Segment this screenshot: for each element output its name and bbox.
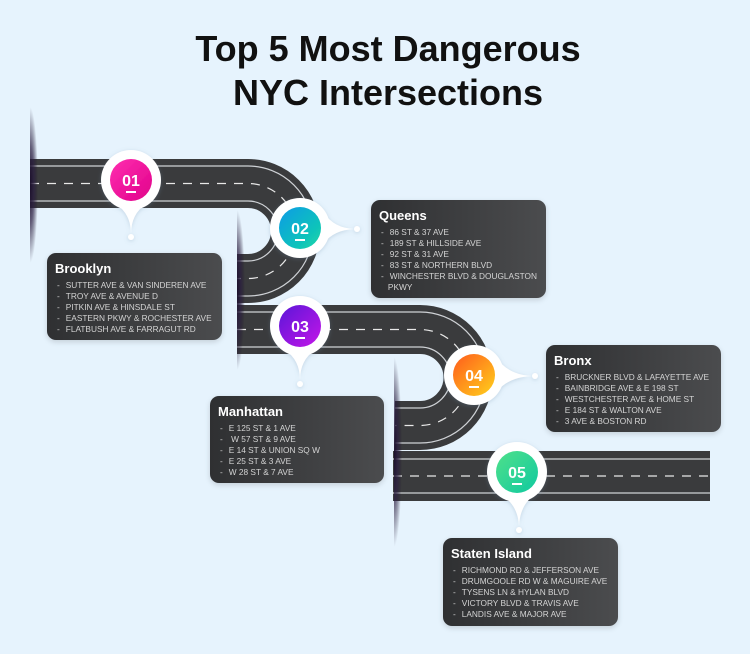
card: Queens: PKWY: [388, 282, 412, 292]
road: segment 5: [393, 451, 710, 501]
card: Brooklyn: SUTTER AVE & VAN SINDEREN AVE: [66, 280, 206, 290]
road: segments 3-4: [237, 312, 486, 443]
card: Manhattan: E 25 ST & 3 AVE: [229, 456, 291, 466]
card: Bronx: WESTCHESTER AVE & HOME ST: [565, 394, 694, 404]
pin 02: 02: [291, 221, 309, 238]
card: Brooklyn: Brooklyn: [55, 261, 111, 276]
card: Bronx: E 184 ST & WALTON AVE: [565, 405, 662, 415]
title: NYC Intersections: [233, 72, 543, 113]
card: Queens: WINCHESTER BLVD & DOUGLASTON: [390, 271, 537, 281]
card: Bronx: BAINBRIDGE AVE & E 198 ST: [565, 383, 679, 393]
road: segments 1-2: [30, 166, 313, 296]
pin 04: [444, 345, 538, 405]
pin 01: [101, 150, 161, 240]
pin 03: [270, 296, 330, 387]
card: Bronx: BRUCKNER BLVD & LAFAYETTE AVE: [565, 372, 709, 382]
card: Manhattan: E 125 ST & 1 AVE: [229, 423, 296, 433]
card: Bronx: 3 AVE & BOSTON RD: [565, 416, 647, 426]
card: Bronx: Bronx: [554, 353, 592, 368]
card: Manhattan: W 57 ST & 9 AVE: [231, 434, 296, 444]
card: Queens: 86 ST & 37 AVE: [390, 227, 449, 237]
card: Staten Island: TYSENS LN & HYLAN BLVD: [462, 587, 569, 597]
pin 03: 03: [291, 319, 309, 336]
card: Manhattan: [210, 396, 384, 483]
card: Queens: Queens: [379, 208, 427, 223]
card: Brooklyn: [47, 253, 222, 340]
card: Staten Island: VICTORY BLVD & TRAVIS AVE: [462, 598, 579, 608]
pin 04: 04: [465, 368, 483, 385]
road graphic: [30, 109, 710, 544]
card: Brooklyn: EASTERN PKWY & ROCHESTER AVE: [66, 313, 212, 323]
card: Staten Island: DRUMGOOLE RD W & MAGUIRE AVE: [462, 576, 607, 586]
title: Top 5 Most Dangerous: [195, 28, 581, 69]
card: Manhattan: W 28 ST & 7 AVE: [229, 467, 293, 477]
card: Brooklyn: TROY AVE & AVENUE D: [66, 291, 158, 301]
card: Staten Island: Staten Island: [451, 546, 532, 561]
card: Brooklyn: FLATBUSH AVE & FARRAGUT RD: [66, 324, 196, 334]
pin 02: [270, 198, 360, 258]
title: [195, 28, 581, 113]
card: Queens: 83 ST & NORTHERN BLVD: [390, 260, 492, 270]
pin 05: 05: [508, 465, 526, 482]
card: Manhattan: E 14 ST & UNION SQ W: [229, 445, 320, 455]
card: Staten Island: [443, 538, 618, 626]
card: Staten Island: RICHMOND RD & JEFFERSON AVE: [462, 565, 599, 575]
card: Queens: 189 ST & HILLSIDE AVE: [390, 238, 481, 248]
card: Bronx: [546, 345, 721, 432]
card: Manhattan: Manhattan: [218, 404, 283, 419]
card: Staten Island: LANDIS AVE & MAJOR AVE: [462, 609, 567, 619]
card: Brooklyn: PITKIN AVE & HINSDALE ST: [66, 302, 175, 312]
pin 01: 01: [122, 173, 140, 190]
card: Queens: 92 ST & 31 AVE: [390, 249, 449, 259]
card: Queens: [371, 200, 546, 298]
road edge shadows: [22, 107, 402, 547]
pin 05: [487, 442, 547, 533]
